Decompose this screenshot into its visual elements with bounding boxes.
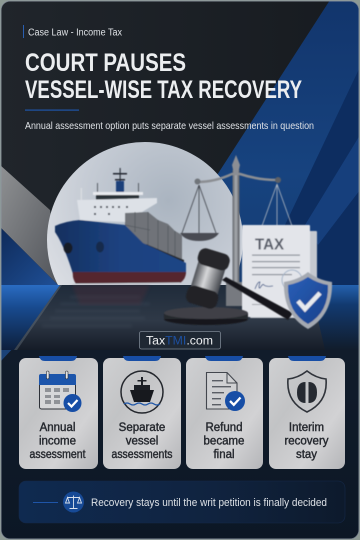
card label: Separate [119,422,165,434]
card label: Refund [205,422,243,434]
backdrop circle [47,142,243,285]
card label [204,422,244,461]
tax document [242,225,317,318]
icon: shield with pause [288,371,326,412]
cargo ship [55,168,186,284]
card label: assessments [112,449,173,461]
card label: assessment [30,449,86,461]
card label [112,422,173,461]
header tag: Case Law - Income Tax [28,28,122,38]
card label: Interim [289,422,324,434]
left diagonal bands [0,165,62,285]
card: separate vessel assessments [103,356,181,469]
card label [30,422,86,461]
shield with check [284,272,332,329]
card label: stay [296,449,317,461]
icon: document with check [206,372,245,411]
brand badge: TaxTMI.com [146,336,213,348]
conclusion bar: Recovery stays until the writ petition is finally decided [91,497,327,509]
card label: Annual [40,422,75,434]
title underline [25,110,79,111]
card label: final [213,449,235,461]
icon: ship in circle [121,371,163,413]
title [25,53,302,98]
title: COURT PAUSES [25,49,186,77]
card label: income [39,436,76,448]
brand badge [140,332,220,349]
card label: recovery [284,436,329,448]
card label [284,422,329,461]
card: refund became final [186,356,263,469]
water [0,285,360,350]
card: interim recovery stay [269,356,345,469]
card: annual income assessment [19,356,98,469]
tax document: TAX [255,236,285,254]
conclusion bar [19,481,345,523]
gavel and sound block [164,247,293,325]
icon: scales in circle [63,492,84,512]
card label: became [204,436,244,448]
icon: calendar [39,371,82,412]
balance scale [180,155,292,306]
subtitle: Annual assessment option puts separate vessel assessments in question [25,120,314,132]
card label: vessel [126,436,158,448]
